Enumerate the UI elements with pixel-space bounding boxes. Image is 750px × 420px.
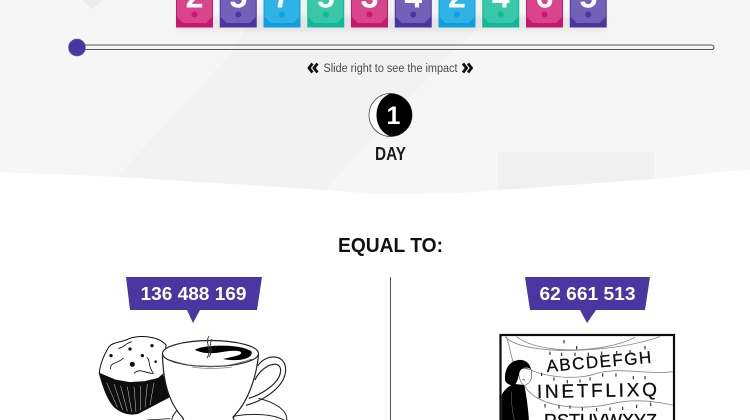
icon: left chevrons [309,64,318,72]
illustration: alphabet wall with lights [500,335,674,420]
illustration: coffee cup and muffin [99,336,287,420]
number banner [525,277,650,323]
light strings [505,337,673,411]
day label: DAY [375,144,406,164]
steam [207,336,212,358]
girl figure [502,360,532,420]
number banner: 136 488 169 [140,283,246,304]
panel: coffee and muffin [99,277,287,420]
panel: streaming board [500,277,674,420]
digit card 4 [395,0,432,28]
day badge [369,94,412,164]
wall letters: ABCDEFGH [546,348,652,376]
coffee [195,346,252,360]
digit card 2 [438,0,476,28]
slider [68,39,714,56]
cup handle [246,357,286,405]
slider thumb [68,39,86,56]
counter digit cards [176,0,607,31]
digit card 5 [307,0,344,28]
board frame [500,335,674,420]
digit card 2 [176,0,213,28]
digit card 4 [482,0,519,28]
heading: EQUAL TO: [338,235,443,257]
digit card 5 [570,0,607,28]
digit card 3 [351,0,388,28]
hint text: Slide right to see the impact [324,63,458,75]
icon: right chevrons [463,64,472,72]
muffin [99,337,170,414]
cup body [162,355,258,420]
number banner: 62 661 513 [540,283,636,304]
digit card 7 [264,0,300,28]
digit card 5 [220,0,257,28]
illustration: alphabet wall with lights: INETFLIXQ [537,380,657,403]
slider hint [309,63,472,75]
icon: moon circle: 1 [387,102,401,130]
center divider [390,277,391,420]
saucer [147,398,287,420]
cup rim [162,340,258,366]
digit card 6 [526,0,563,28]
number banner [126,277,262,323]
slider track [76,45,714,50]
